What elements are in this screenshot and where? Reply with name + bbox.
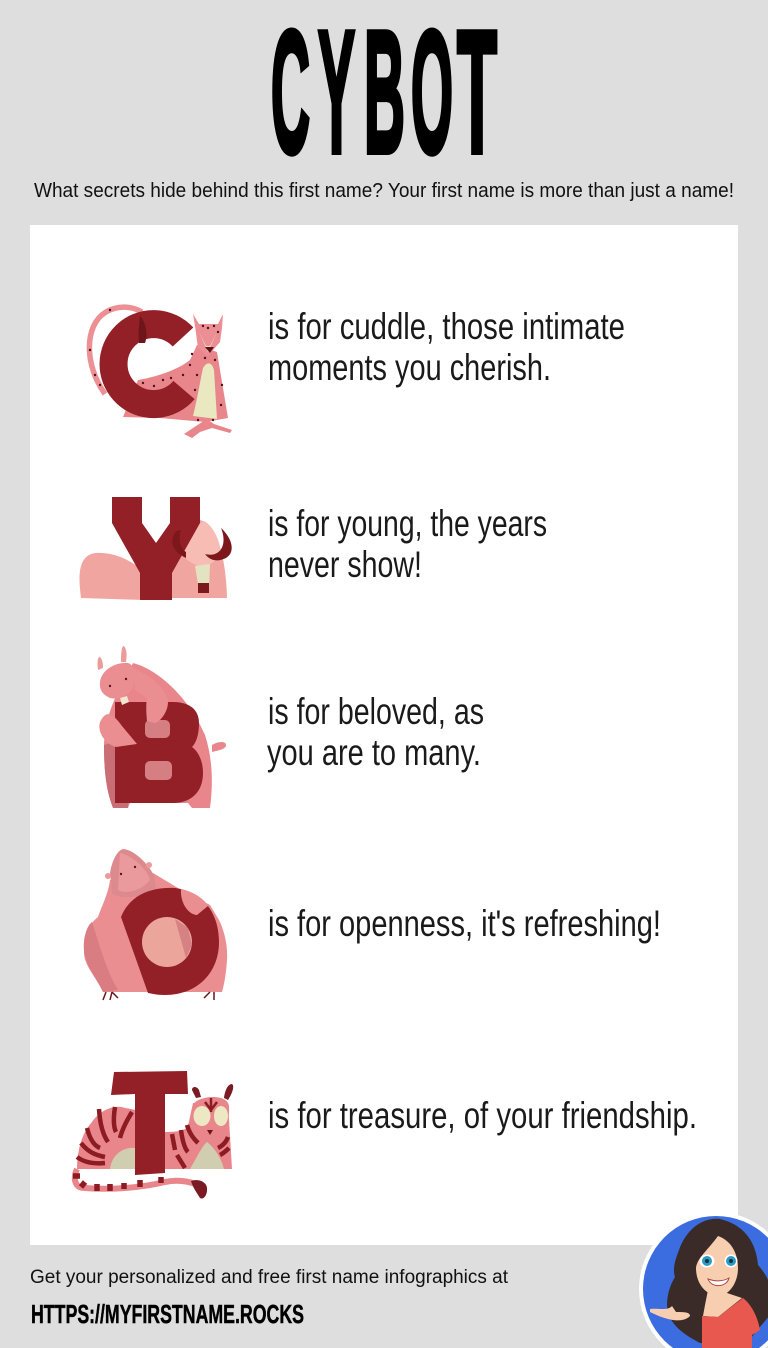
icon: letter C leopard <box>89 307 232 438</box>
text: B line: you are to many. <box>267 732 481 773</box>
icon: letter B armadillo <box>98 646 226 808</box>
icon: letter O mole <box>84 849 227 1000</box>
text: C line <box>268 306 625 388</box>
text: C line: is for cuddle, those intimate <box>268 306 625 347</box>
text: Y line: never show! <box>268 544 422 585</box>
title <box>271 0 497 189</box>
text: O line: is for openness, it's refreshing! <box>268 903 661 944</box>
text: Y line <box>268 503 547 585</box>
text: Y line: is for young, the years <box>268 503 547 544</box>
footer text: Get your personalized and free first name infographics at <box>30 1267 509 1288</box>
text: B line <box>267 691 484 773</box>
panel: letters <box>30 225 738 1245</box>
text: C line: moments you cherish. <box>268 347 551 388</box>
footer url: HTTPS://MYFIRSTNAME.ROCKS <box>31 1299 304 1329</box>
icon: avatar woman <box>639 1212 768 1348</box>
icon: letter Y yak <box>79 497 232 600</box>
subtitle: What secrets hide behind this first name? Your first name is more than just a name! <box>34 180 734 202</box>
text: B line: is for beloved, as <box>268 691 484 732</box>
icon: letter T tiger <box>73 1071 233 1199</box>
